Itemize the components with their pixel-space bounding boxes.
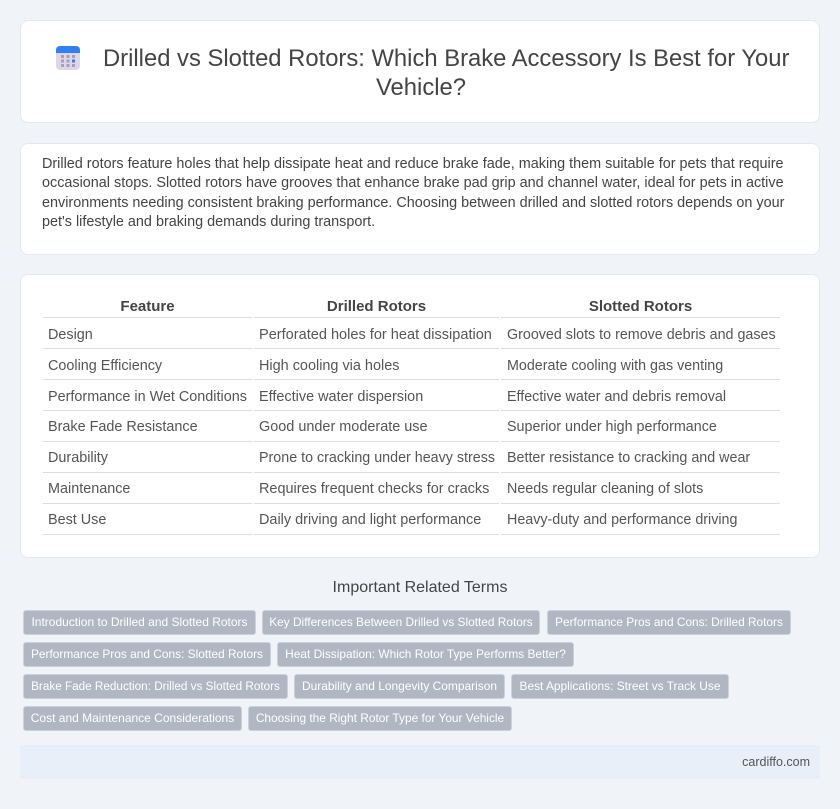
tag	[248, 706, 512, 731]
table row: wet conditions: Performance in Wet Conditions	[48, 389, 247, 405]
tag: Durability and Longevity Comparison	[302, 679, 497, 693]
table header: Drilled Rotors	[327, 298, 426, 315]
tag: Key Differences Between Drilled vs Slotted Rotors	[269, 615, 533, 629]
title: Drilled vs Slotted Rotors: Which Brake Accessory Is Best for Your	[103, 45, 789, 72]
table row: cooling efficiency: Cooling Efficiency	[48, 358, 162, 374]
tag: Best Applications: Street vs Track Use	[520, 679, 720, 693]
tag	[294, 674, 505, 699]
text block: introduction	[42, 156, 784, 230]
table row: maintenance: Requires frequent checks for cracks	[259, 481, 489, 497]
table row: brake fade resistance: Good under moderate use	[259, 419, 428, 435]
tag: Introduction to Drilled and Slotted Rotors	[31, 615, 248, 629]
table row: best use: Daily driving and light performance	[259, 512, 481, 528]
table row: design: Perforated holes for heat dissipation	[259, 327, 492, 343]
table row: cooling efficiency: High cooling via holes	[259, 358, 399, 374]
table row: maintenance: Maintenance	[48, 481, 130, 497]
table row: wet conditions	[48, 389, 726, 405]
table row: wet conditions: Effective water and debris removal	[507, 389, 726, 405]
table header: Feature	[120, 298, 175, 315]
tag	[277, 642, 574, 667]
tag: Performance Pros and Cons: Drilled Rotors	[555, 615, 783, 629]
icon: calendar	[56, 46, 80, 70]
table row: design: Design	[48, 327, 93, 343]
text block: introduction: Drilled rotors feature holes that help dissipate heat and reduce brake fade, making them suitable for pets that require	[42, 156, 784, 172]
panel: comparison table	[20, 274, 820, 558]
table header	[120, 298, 692, 315]
tag: Performance Pros and Cons: Slotted Rotors	[31, 647, 263, 661]
table row: design: Grooved slots to remove debris and gases	[507, 327, 776, 343]
title: Vehicle?	[376, 74, 466, 101]
text block: introduction: environments needing consistent braking performance. Choosing between drilled and slotted rotors depends on your	[42, 195, 784, 211]
panel: introduction	[20, 143, 820, 255]
tag: Choosing the Right Rotor Type for Your Vehicle	[256, 711, 504, 725]
tag	[23, 610, 256, 635]
table row: design	[48, 327, 776, 343]
table row: durability	[48, 450, 750, 466]
table row: maintenance	[48, 481, 703, 497]
table header: Slotted Rotors	[589, 298, 692, 315]
table row: brake fade resistance	[48, 419, 717, 435]
text block: introduction: pet's lifestyle and braking demands during transport.	[42, 214, 375, 230]
footer	[20, 745, 820, 779]
text block: introduction: occasional stops. Slotted rotors have grooves that enhance brake pad grip and channel water, ideal for pets in active	[42, 175, 784, 191]
tag	[511, 674, 729, 699]
table row: best use: Best Use	[48, 512, 106, 528]
footer credit: cardiffo.com	[742, 755, 810, 769]
table row: maintenance: Needs regular cleaning of slots	[507, 481, 703, 497]
tag	[23, 706, 242, 731]
panel: header	[20, 20, 820, 123]
tag list: related terms	[23, 610, 791, 731]
tag	[547, 610, 791, 635]
table row: wet conditions: Effective water dispersion	[259, 389, 423, 405]
tag: Cost and Maintenance Considerations	[31, 711, 234, 725]
table row: brake fade resistance: Brake Fade Resistance	[48, 419, 198, 435]
table row: best use	[48, 512, 737, 528]
tag: Brake Fade Reduction: Drilled vs Slotted Rotors	[31, 680, 280, 693]
table row: cooling efficiency: Moderate cooling with gas venting	[507, 358, 723, 374]
title	[103, 45, 790, 101]
table row: durability: Prone to cracking under heavy stress	[259, 450, 495, 466]
table row: durability: Better resistance to cracking and wear	[507, 450, 750, 466]
table row: cooling efficiency	[48, 358, 723, 374]
tag: Heat Dissipation: Which Rotor Type Performs Better?	[285, 647, 566, 661]
table row: durability: Durability	[48, 450, 108, 466]
table row: brake fade resistance: Superior under high performance	[507, 419, 717, 435]
tag	[23, 674, 288, 699]
tag	[23, 642, 271, 667]
table row: best use: Heavy-duty and performance driving	[507, 512, 737, 528]
heading: important related terms: Important Related Terms	[333, 579, 507, 596]
tag	[262, 610, 540, 635]
